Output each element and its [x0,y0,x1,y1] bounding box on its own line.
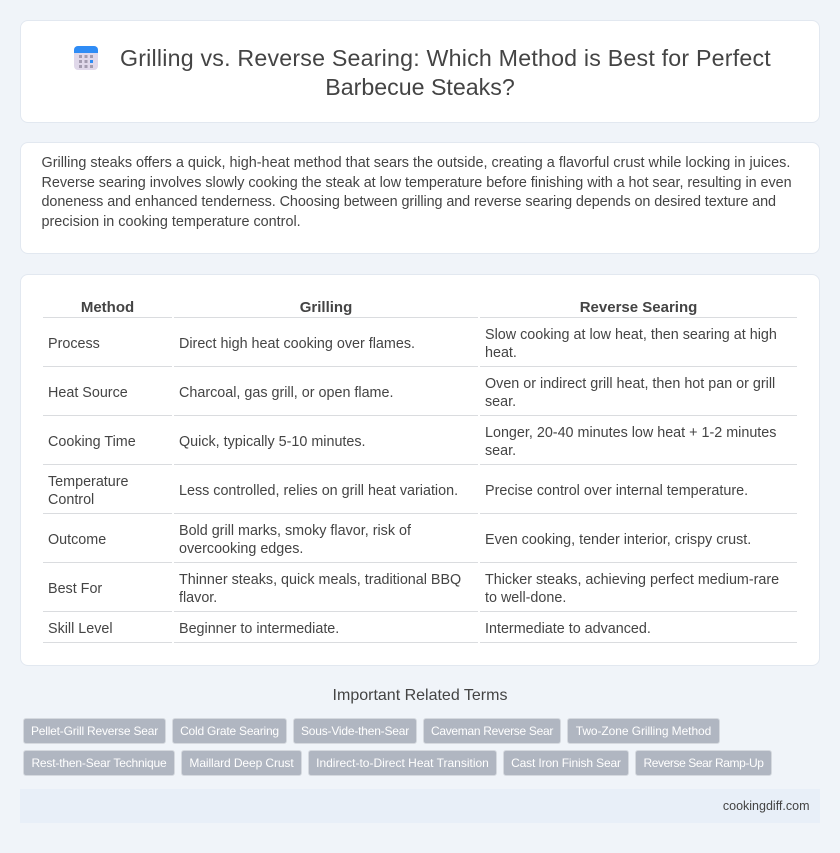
row: cooking time: sear. [485,443,516,459]
table header row: Grilling [300,299,352,316]
row: cooking time [43,425,797,465]
footer bar [20,789,820,823]
heading: related terms: Important Related Terms [333,687,507,704]
row: skill level: Skill Level [48,621,113,637]
tag: Indirect-to-Direct Heat Transition [316,756,489,770]
tag: Reverse Sear Ramp-Up [643,756,764,770]
row: skill level [43,621,797,643]
row: outcome: Even cooking, tender interior, crispy crust. [485,532,751,548]
comparison table [43,299,797,643]
tag: Two-Zone Grilling Method [576,724,711,738]
row: cooking time: Quick, typically 5-10 minutes. [179,434,366,450]
row: cooking time: Cooking Time [48,434,136,450]
row: temperature control: Less controlled, relies on grill heat variation. [179,483,458,499]
title [120,45,771,100]
row: heat source: Charcoal, gas grill, or open flame. [179,385,393,401]
intro text [42,155,792,230]
panel: comparison table [20,274,820,666]
row: outcome [43,523,797,563]
row: best for: flavor. [179,590,217,606]
panel: introduction [20,142,820,254]
tag [503,750,629,776]
footer source text: cookingdiff.com [723,799,810,813]
row: best for: to well-done. [485,590,566,606]
intro text: Grilling steaks offers a quick, high-heat method that sears the outside, creating a flavorful crust while locking in juices. [42,155,790,171]
related term tags [23,718,772,776]
row: outcome: Bold grill marks, smoky flavor, risk of [179,523,411,539]
row: heat source [43,376,797,416]
row: skill level: Intermediate to advanced. [485,621,651,637]
row: cooking time: Longer, 20-40 minutes low heat + 1-2 minutes [485,425,776,441]
row: temperature control [43,474,797,514]
tag [567,718,720,744]
tag [172,718,287,744]
table header row [43,299,797,318]
tag: Sous-Vide-then-Sear [301,724,409,738]
tag: Rest-then-Sear Technique [31,756,167,770]
row: skill level: Beginner to intermediate. [179,621,339,637]
row: heat source: Heat Source [48,385,128,401]
row: temperature control: Temperature [48,474,129,490]
tag [635,750,772,776]
tag [23,750,175,776]
intro text: Reverse searing involves slowly cooking the steak at low temperature before finishing with a hot sear, resulting in even [42,175,792,191]
row: heat source: sear. [485,394,516,410]
row: best for: Thinner steaks, quick meals, traditional BBQ [179,572,461,588]
tag [181,750,302,776]
tag [293,718,417,744]
intro text: doneness and enhanced tenderness. Choosing between grilling and reverse searing depends on desired texture and [42,194,776,210]
tag: Maillard Deep Crust [189,756,294,770]
row: best for: Thicker steaks, achieving perfect medium-rare [485,572,779,588]
title: Grilling vs. Reverse Searing: Which Method is Best for Perfect [120,45,771,71]
table header row: Method [81,299,134,316]
row: process: heat. [485,345,517,361]
tag [308,750,497,776]
row: temperature control: Control [48,492,94,508]
tag: Cast Iron Finish Sear [511,756,621,770]
row: process: Process [48,336,100,352]
row: heat source: Oven or indirect grill heat, then hot pan or grill [485,376,775,392]
panel: title header [20,20,820,123]
icon: calendar [74,46,98,70]
row: outcome: overcooking edges. [179,541,303,557]
tag: Pellet-Grill Reverse Sear [31,724,158,738]
row: best for: Best For [48,581,102,597]
tag [23,718,166,744]
row: outcome: Outcome [48,532,106,548]
tag: Caveman Reverse Sear [431,724,553,738]
tag [423,718,561,744]
row: process: Slow cooking at low heat, then searing at high [485,327,777,343]
row: best for [43,572,797,612]
title: Barbecue Steaks? [325,74,515,100]
tag: Cold Grate Searing [180,724,279,738]
table header row: Reverse Searing [580,299,697,316]
row: process [43,327,797,367]
row: temperature control: Precise control over internal temperature. [485,483,748,499]
intro text: precision in cooking temperature control. [42,214,301,230]
row: process: Direct high heat cooking over flames. [179,336,415,352]
